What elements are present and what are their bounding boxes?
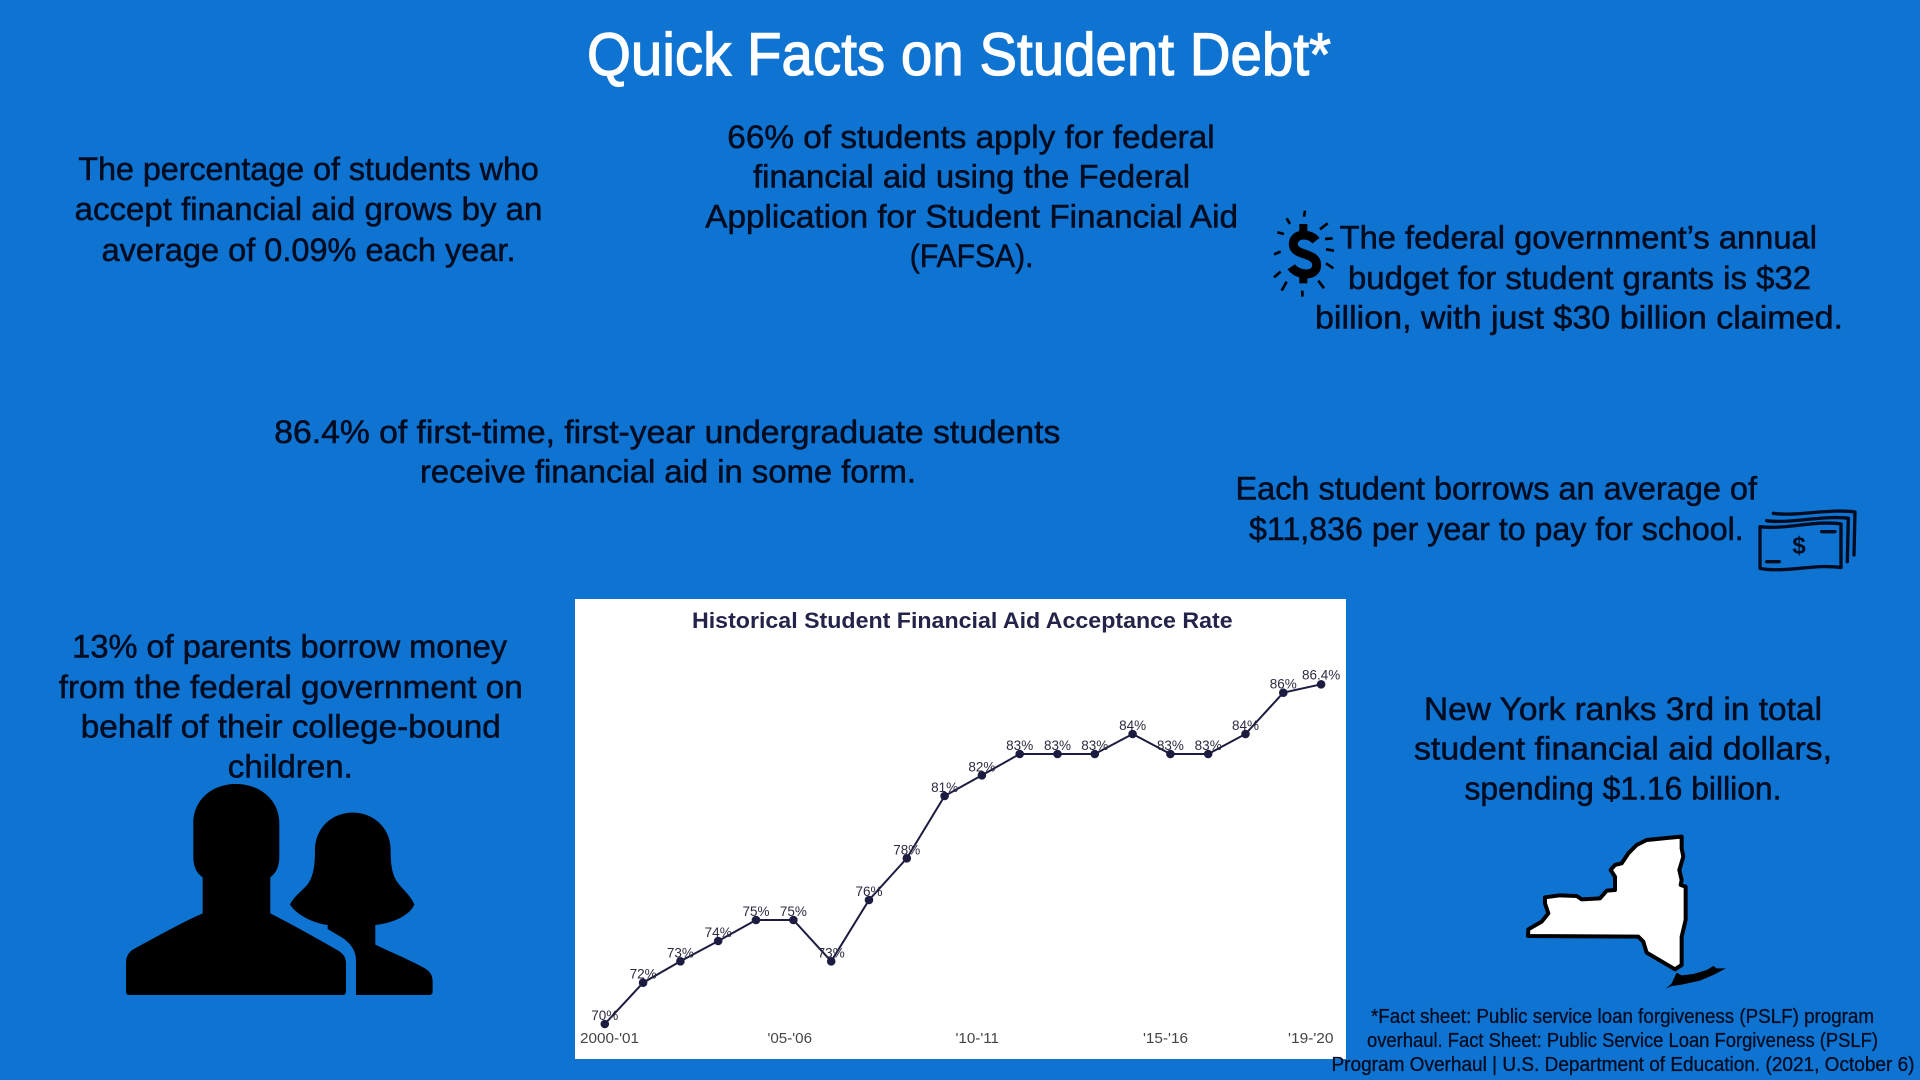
chart data labels: 75% bbox=[742, 904, 770, 919]
text block: federal grants budget: budget for student grants is $32 bbox=[1348, 260, 1811, 296]
chart line bbox=[605, 684, 1321, 1024]
text block: federal grants budget: The federal government’s annual bbox=[1340, 220, 1817, 256]
text block: parents borrowing: from the federal government on bbox=[59, 669, 523, 705]
chart data labels: 81% bbox=[931, 780, 958, 795]
title: Quick Facts on Student Debt* bbox=[587, 21, 1331, 88]
text block: New York ranking: spending $1.16 billion. bbox=[1464, 771, 1782, 807]
chart data labels: 78% bbox=[893, 842, 920, 857]
text block: FAFSA: financial aid using the Federal bbox=[753, 158, 1190, 194]
chart title: Historical Student Financial Aid Acceptance Rate bbox=[692, 608, 1233, 633]
text block: first-time undergraduates: 86.4% of first-time, first-year undergraduate students bbox=[274, 414, 1060, 450]
text block: parents borrowing: behalf of their college-bound bbox=[81, 708, 501, 744]
chart x axis labels: '15-'16 bbox=[1143, 1031, 1188, 1047]
icon: shining dollar sign bbox=[1274, 211, 1334, 297]
text block: average borrowing: $11,836 per year to pay for school. bbox=[1249, 511, 1744, 547]
chart data labels: 83% bbox=[1044, 738, 1071, 753]
text block: acceptance growth: average of 0.09% each year. bbox=[102, 232, 515, 268]
text block: parents borrowing: 13% of parents borrow money bbox=[72, 628, 507, 664]
chart data labels: 70% bbox=[591, 1008, 618, 1023]
chart data labels: 74% bbox=[705, 925, 732, 940]
text block: New York ranking: student financial aid dollars, bbox=[1414, 730, 1832, 766]
text block: acceptance growth: accept financial aid grows by an bbox=[75, 191, 542, 227]
text block: average borrowing: Each student borrows an average of bbox=[1236, 471, 1757, 507]
chart data labels: 86% bbox=[1270, 677, 1297, 692]
text block: first-time undergraduates: receive financial aid in some form. bbox=[420, 454, 916, 490]
chart data labels: 82% bbox=[968, 759, 995, 774]
chart x axis labels: 2000-'01 bbox=[580, 1031, 639, 1047]
text block: New York ranking bbox=[1414, 691, 1832, 807]
icon: New York state map bbox=[1528, 837, 1726, 989]
text block: New York ranking: New York ranks 3rd in total bbox=[1424, 691, 1822, 727]
chart data labels: 84% bbox=[1119, 718, 1146, 733]
icon: stack of bills bbox=[1760, 511, 1855, 570]
chart data labels: 72% bbox=[630, 967, 657, 982]
icon: stack of bills: $ bbox=[1792, 532, 1806, 559]
chart data labels: 83% bbox=[1081, 738, 1108, 753]
panel: line chart of acceptance rate bbox=[575, 599, 1346, 1059]
text block: average borrowing bbox=[1236, 471, 1757, 547]
chart data labels: 84% bbox=[1232, 718, 1259, 733]
chart x axis labels: '05-'06 bbox=[768, 1031, 812, 1047]
chart x axis labels: '10-'11 bbox=[956, 1031, 999, 1047]
chart x axis labels bbox=[580, 1031, 1334, 1047]
chart data labels: 73% bbox=[818, 945, 845, 960]
chart data labels: 83% bbox=[1157, 738, 1184, 753]
chart data labels: 86.4% bbox=[1302, 668, 1340, 682]
footnote: *Fact sheet: Public service loan forgiveness (PSLF) program bbox=[1371, 1006, 1874, 1028]
footnote bbox=[1332, 1006, 1914, 1076]
text block: FAFSA: 66% of students apply for federal bbox=[727, 119, 1215, 155]
text block: federal grants budget bbox=[1315, 220, 1843, 336]
text block: parents borrowing: children. bbox=[228, 748, 353, 784]
chart data labels: 83% bbox=[1195, 738, 1222, 753]
text block: federal grants budget: billion, with just $30 billion claimed. bbox=[1315, 300, 1843, 336]
text block: FAFSA: Application for Student Financial Aid bbox=[705, 198, 1238, 234]
chart points bbox=[600, 680, 1325, 1028]
text block: acceptance growth bbox=[75, 151, 542, 268]
footnote: overhaul. Fact Sheet: Public Service Loan Forgiveness (PSLF) bbox=[1367, 1030, 1878, 1052]
chart x axis labels: '19-'20 bbox=[1288, 1031, 1334, 1047]
text block: acceptance growth: The percentage of students who bbox=[78, 151, 539, 187]
text block: first-time undergraduates bbox=[274, 414, 1060, 490]
text block: FAFSA: (FAFSA). bbox=[910, 238, 1034, 274]
icon: parents silhouettes bbox=[126, 784, 433, 995]
text block: parents borrowing bbox=[59, 628, 523, 784]
chart data labels: 83% bbox=[1006, 738, 1033, 753]
chart data labels: 75% bbox=[780, 904, 807, 919]
chart data labels: 76% bbox=[855, 884, 883, 899]
chart data labels: 73% bbox=[667, 945, 694, 960]
text block: FAFSA bbox=[705, 119, 1238, 274]
chart data labels bbox=[591, 668, 1340, 1023]
